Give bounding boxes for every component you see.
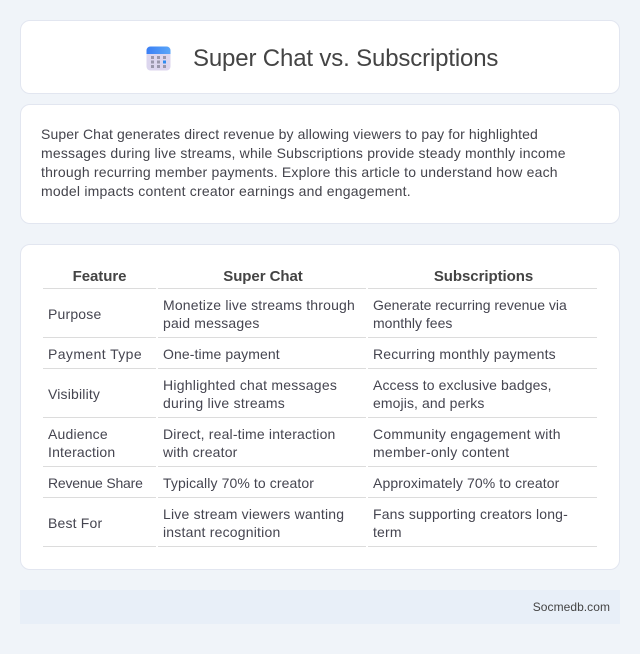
row: Purpose: monthly fees (373, 315, 452, 331)
intro paragraph: Super Chat generates direct revenue by allowing viewers to pay for highlighted (41, 126, 538, 142)
row: Purpose (48, 297, 567, 331)
icon: calendar (146, 46, 170, 70)
row: Best For: Fans supporting creators long- (373, 506, 568, 522)
row: Audience Interaction: Interaction (48, 444, 115, 460)
row: Visibility (48, 377, 552, 411)
row: Revenue Share: Typically 70% to creator (163, 475, 314, 491)
row: Purpose: Monetize live streams through (163, 297, 355, 313)
panel: title card (20, 20, 620, 94)
footer bar (20, 590, 620, 624)
intro paragraph (41, 126, 566, 199)
row: Audience Interaction: member-only content (373, 444, 509, 460)
row: Revenue Share: Revenue Share (48, 475, 143, 491)
row: Best For: term (373, 524, 402, 540)
title: Super Chat vs. Subscriptions (193, 45, 498, 72)
row: Visibility: during live streams (163, 395, 285, 411)
table header: Super Chat (223, 268, 303, 285)
row: Revenue Share: Approximately 70% to creator (373, 475, 559, 491)
panel: intro text (20, 104, 620, 224)
intro paragraph: through recurring member payments. Explore this article to understand how each (41, 164, 558, 180)
row: Best For: Live stream viewers wanting (163, 506, 344, 522)
row: Purpose: Generate recurring revenue via (373, 297, 567, 313)
table header: Subscriptions (434, 268, 533, 285)
row: Payment Type: Payment Type (48, 346, 142, 362)
row: Visibility: Access to exclusive badges, (373, 377, 552, 393)
row: Purpose: Purpose (48, 306, 101, 322)
row: Best For: instant recognition (163, 524, 280, 540)
row: Audience Interaction: Direct, real-time interaction (163, 426, 336, 442)
row: Best For (48, 506, 568, 540)
row: Best For: Best For (48, 515, 102, 531)
row: Visibility: emojis, and perks (373, 395, 484, 411)
row: Payment Type: Recurring monthly payments (373, 346, 556, 362)
row: Audience Interaction: Audience (48, 426, 108, 442)
row: Audience Interaction: Community engagement with (373, 426, 561, 442)
table header: Feature (73, 268, 126, 285)
row: Purpose: paid messages (163, 315, 260, 331)
row: Audience Interaction: with creator (163, 444, 238, 460)
row: Revenue Share (48, 475, 560, 491)
row: Visibility: Visibility (48, 386, 100, 402)
footer source text: Socmedb.com (533, 600, 610, 614)
intro paragraph: messages during live streams, while Subscriptions provide steady monthly income (41, 145, 566, 161)
table header (73, 268, 533, 285)
panel: comparison table (20, 244, 620, 570)
intro paragraph: model impacts content creator earnings and engagement. (41, 183, 411, 199)
row: Payment Type: One-time payment (163, 346, 280, 362)
row: Audience Interaction (48, 426, 561, 460)
row: Visibility: Highlighted chat messages (163, 377, 337, 393)
row: Payment Type (48, 346, 556, 362)
